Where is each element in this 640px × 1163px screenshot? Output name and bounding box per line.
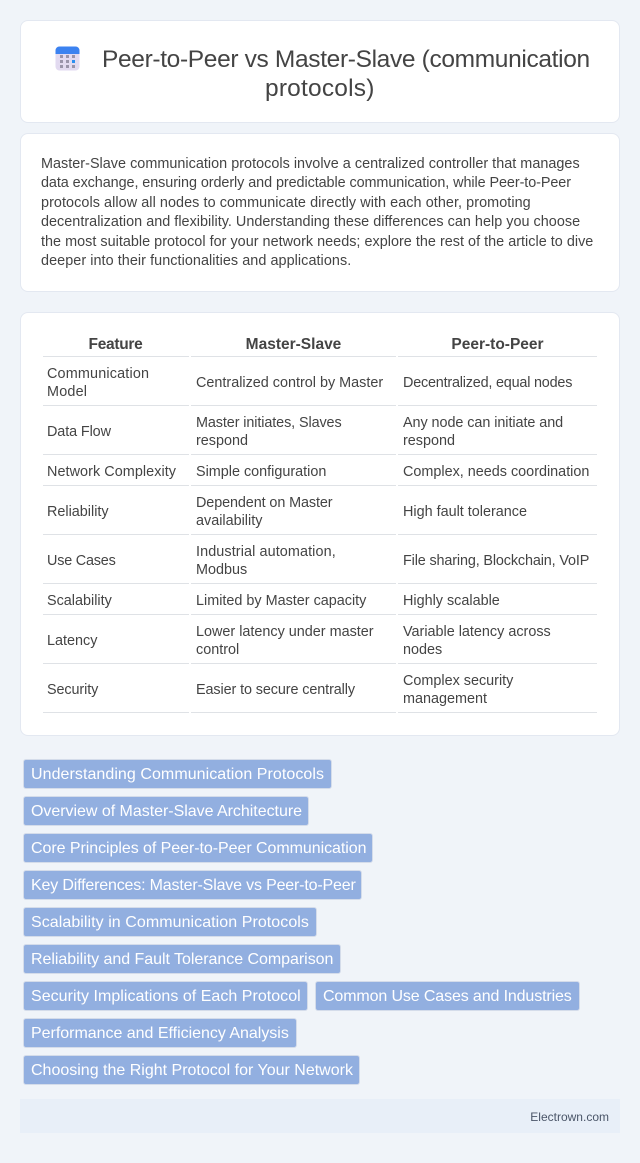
title: protocols) <box>265 75 375 102</box>
table rows: Simple configuration <box>196 464 326 480</box>
tag: Overview of Master-Slave Architecture <box>31 803 302 820</box>
table rows: Variable latency across <box>403 624 551 640</box>
table header: Peer-to-Peer <box>451 336 544 353</box>
tag: Performance and Efficiency Analysis <box>31 1025 289 1042</box>
tag: Key Differences: Master-Slave vs Peer-to-Peer <box>31 877 356 894</box>
table rows: Centralized control by Master <box>196 375 383 391</box>
footer bar <box>20 1099 620 1133</box>
table rows: Master initiates, Slaves <box>196 415 342 431</box>
tag <box>23 981 308 1011</box>
intro text <box>41 156 593 269</box>
tag: Choosing the Right Protocol for Your Network <box>31 1062 353 1079</box>
table rows: Lower latency under master <box>196 624 374 640</box>
table rows: Network Complexity <box>47 464 176 480</box>
tag <box>23 833 373 863</box>
intro panel <box>20 133 620 292</box>
tag: Scalability in Communication Protocols <box>31 914 309 931</box>
table rows: nodes <box>403 642 442 658</box>
table rows: Scalability <box>47 593 112 609</box>
table rows: Data Flow <box>47 424 111 440</box>
intro text: data exchange, ensuring orderly and predictable communication, while Peer-to-Peer <box>41 175 571 191</box>
tag: Core Principles of Peer-to-Peer Communication <box>31 840 366 857</box>
tag <box>23 870 362 900</box>
table rows: Industrial automation, <box>196 544 336 560</box>
table rows: Dependent on Master <box>196 495 332 511</box>
comparison table <box>43 336 597 713</box>
table rows: Complex security <box>403 673 513 689</box>
table rows: availability <box>196 513 262 529</box>
tag <box>23 1055 360 1085</box>
table rows: Easier to secure centrally <box>196 682 355 698</box>
intro text: deeper into their functionalities and applications. <box>41 253 351 269</box>
table header: Master-Slave <box>246 336 341 353</box>
table rows: control <box>196 642 239 658</box>
title <box>102 46 590 102</box>
table header: Feature <box>89 336 142 353</box>
intro text: decentralization and flexibility. Understanding these differences can help you choose <box>41 214 580 230</box>
icon: calendar grid <box>56 46 80 70</box>
comparison table panel <box>20 312 620 736</box>
tag <box>315 981 580 1011</box>
table rows: Limited by Master capacity <box>196 593 366 609</box>
table rows: Complex, needs coordination <box>403 464 589 480</box>
intro text: Master-Slave communication protocols involve a centralized controller that manages <box>41 156 580 172</box>
table rows: Security <box>47 682 98 698</box>
tag: Reliability and Fault Tolerance Comparison <box>31 951 333 968</box>
table rows: Use Cases <box>47 553 116 569</box>
table rows <box>43 366 597 713</box>
table rows: Model <box>47 384 87 400</box>
table rows: respond <box>196 433 248 449</box>
tag: Security Implications of Each Protocol <box>31 988 301 1005</box>
table rows: Latency <box>47 633 97 649</box>
table rows: Any node can initiate and <box>403 415 563 431</box>
header panel <box>20 20 620 123</box>
table rows: Communication <box>47 366 149 382</box>
tag <box>23 1018 297 1048</box>
table rows: management <box>403 691 487 707</box>
table rows: Decentralized, equal nodes <box>403 375 572 391</box>
table rows: Modbus <box>196 562 247 578</box>
intro text: the most suitable protocol for your network needs; explore the rest of the article to dive <box>41 234 593 250</box>
table header <box>43 336 597 357</box>
tag: Common Use Cases and Industries <box>323 988 572 1005</box>
table rows: respond <box>403 433 455 449</box>
tag: Understanding Communication Protocols <box>31 766 324 783</box>
table rows: High fault tolerance <box>403 504 527 520</box>
tag <box>23 796 309 826</box>
table rows: Reliability <box>47 504 109 520</box>
tag <box>23 907 317 937</box>
footer credit: Electrown.com <box>530 1110 609 1124</box>
title: Peer-to-Peer vs Master-Slave (communication <box>102 46 590 73</box>
topic tags <box>23 759 580 1085</box>
tag <box>23 759 332 789</box>
table rows: Highly scalable <box>403 593 500 609</box>
tag <box>23 944 341 974</box>
table rows: File sharing, Blockchain, VoIP <box>403 553 589 569</box>
intro text: protocols allow all nodes to communicate directly with each other, promoting <box>41 195 531 211</box>
